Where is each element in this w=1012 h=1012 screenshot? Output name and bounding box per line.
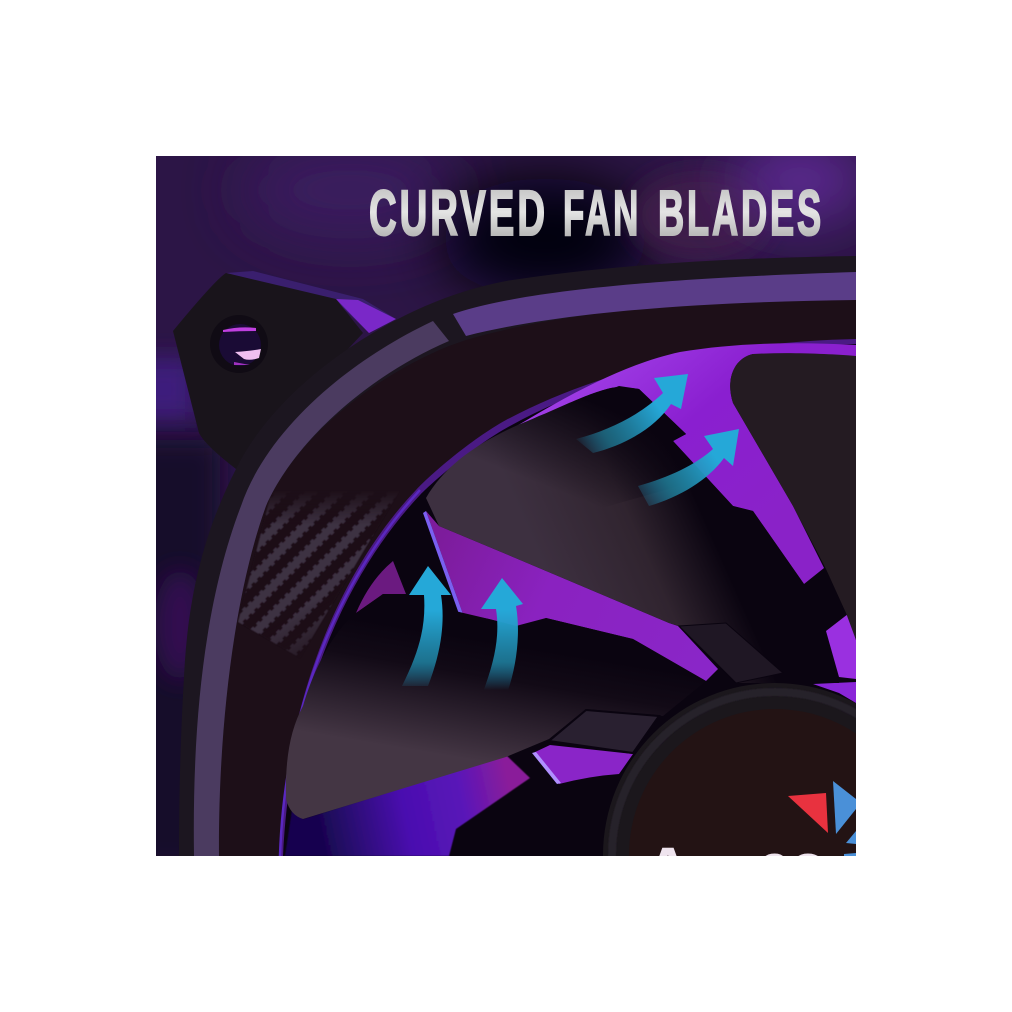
logo blue lower triangle — [846, 831, 856, 844]
airflow arrow left — [402, 566, 451, 686]
frame purple strip top — [453, 272, 856, 336]
title: BLADES — [658, 177, 824, 249]
middle fan blade — [426, 387, 839, 683]
hub with logo — [603, 683, 856, 856]
logo wordmark: A — [644, 833, 692, 907]
title: CURVED — [369, 177, 548, 249]
logo red triangle — [788, 793, 828, 833]
purple lower gap — [533, 745, 633, 784]
purple wedge between blades — [510, 343, 856, 584]
logo wordmark — [659, 848, 818, 856]
bright edge on band — [423, 511, 463, 614]
fan frame outer body — [179, 256, 856, 856]
frame inner face — [224, 314, 599, 725]
airflow arrow centre — [481, 578, 523, 696]
blurred purple background — [130, 140, 870, 870]
product photo panel: fan close-up — [156, 156, 856, 856]
mounting ear top face — [226, 271, 396, 333]
logo wordmark: o — [790, 832, 826, 899]
logo blue triangle — [833, 781, 856, 834]
lower fan blade — [286, 594, 706, 819]
fan opening dark interior — [283, 344, 856, 856]
mounting ear — [173, 273, 363, 469]
title: FAN — [563, 177, 641, 249]
airflow arrow top — [576, 374, 688, 453]
title — [370, 189, 820, 236]
small magenta area — [356, 561, 406, 613]
frame purple strip left — [194, 321, 449, 856]
screw hole — [210, 315, 268, 373]
right fan blade — [730, 353, 856, 640]
opening glow line left — [280, 490, 420, 856]
blade tab upper — [679, 623, 783, 683]
purple right gap — [826, 614, 856, 679]
purple band mid — [426, 511, 718, 681]
purple at hub top — [813, 682, 856, 703]
bottom-left purple glow — [285, 755, 530, 856]
fan opening ring — [279, 339, 856, 856]
blade tab lower — [549, 710, 659, 753]
bright edge lower gap — [532, 752, 561, 784]
airflow arrow right — [638, 429, 739, 506]
carbon fibre texture — [238, 490, 400, 658]
logo blue bottom sliver — [844, 853, 856, 856]
mounting ear bright facet — [336, 299, 396, 333]
logo wordmark: e — [757, 832, 791, 899]
